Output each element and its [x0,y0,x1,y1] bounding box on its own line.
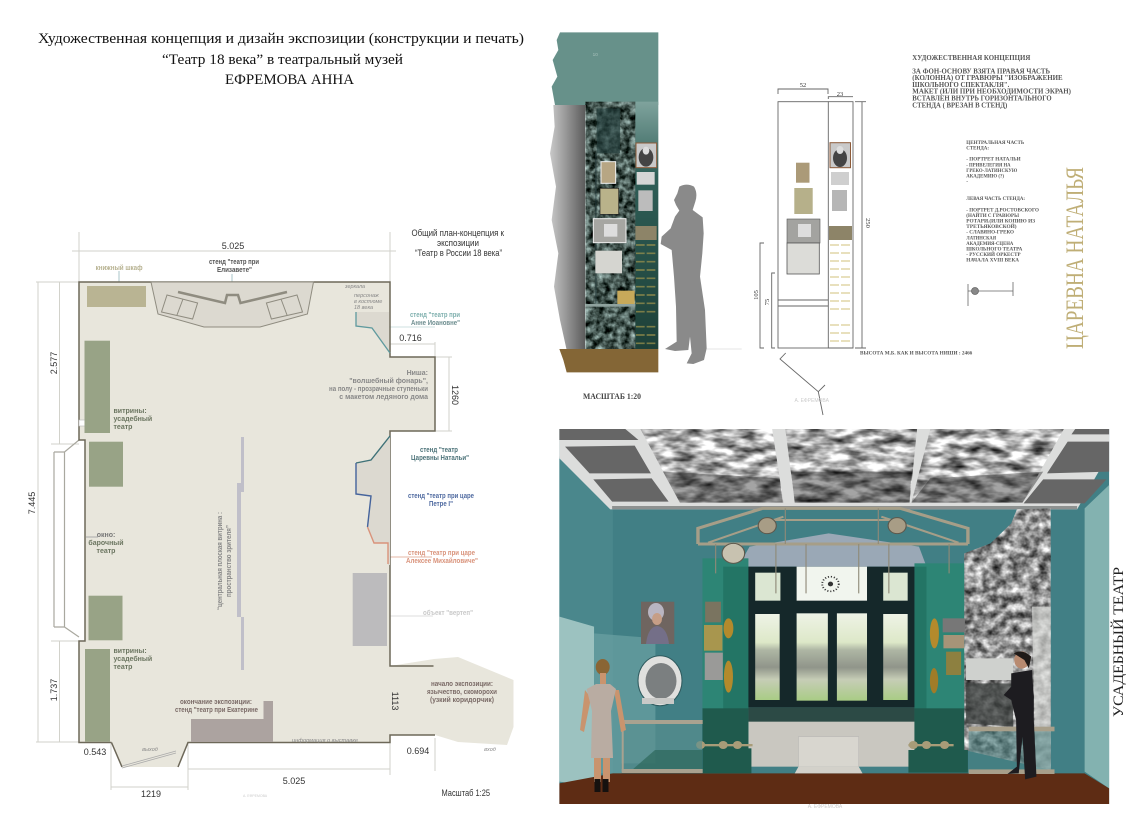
text block: stand parts: ЦЕНТРАЛЬНАЯ ЧАСТЬ [966,140,1025,146]
plan dimensions: 5.025 [222,241,244,251]
title: ЕФРЕМОВА АННА [225,72,354,88]
text block: stand parts: ТРЕТЬЯКОВСКОЙ) [966,222,1017,230]
plan dimensions: 0.543 [84,747,106,757]
plan labels: (узкий коридорчик) [430,696,494,704]
elevation outline [760,89,866,415]
right engraving wall [964,508,1051,770]
Catherine stand [191,701,273,742]
plan italic notes: персонаж [354,293,379,299]
panel: room visualization [559,429,1109,804]
plan labels: окончание экспозиции: [180,699,252,706]
elevation artworks [787,143,852,274]
stage truss [698,508,968,593]
text block: stand parts: ШКОЛЬНОГО ТЕАТРА [966,247,1022,253]
stands on right wall [356,436,390,565]
plan heading: экспозиции [437,238,479,248]
stand: Elizabeth [151,282,314,327]
text block: stand parts: (НАЙТИ С ГРАВЮРЫ [966,211,1020,219]
text block: artistic concept: МАКЕТ (ИЛИ ПРИ НЕОБХОДИМОСТИ ЭКРАН) [912,87,1071,96]
floor [559,349,658,372]
elevation dimensions: 75 [764,299,771,305]
text block: stand parts: ГРЕКО-ЛАТИНСКУЮ [966,168,1017,174]
column [585,102,635,349]
plan heading: “Театр в России 18 века” [415,248,502,258]
plan italic notes: в костюме [354,299,382,305]
plan labels: усадебный [114,415,152,423]
plan dimensions: 5.025 [283,776,305,786]
text block: stand parts [966,140,1040,264]
right side wall [1085,485,1109,788]
text block: stand parts: СТЕНДА: [966,146,989,152]
left vitrine in room [622,720,703,773]
plan labels: Алексее Михайловиче" [406,557,478,565]
text block: stand parts: - ПРИВЕЛЕГИЯ НА [966,162,1011,168]
plan labels: Петре I" [429,501,453,508]
text block: stand parts: - СЛАВЯНО-ГРЕКО [966,230,1015,236]
panel: floor plan [27,228,514,799]
plan labels: Ниша: [407,370,428,377]
right panel script [830,245,852,341]
elevation dimensions: 23 [837,91,843,98]
text block: stand parts: ЛЕВАЯ ЧАСТЬ СТЕНДА: [966,196,1025,202]
text block: artistic concept: СТЕНДА ( ВРЕЗАН В СТЕНД) [912,100,1008,109]
stand artworks [593,143,657,304]
dark green lower panels [702,708,968,773]
plan italic notes: 18 века [354,305,373,311]
vitrines [84,341,123,742]
title [38,31,524,88]
right panel [633,102,658,349]
portrait painting [641,602,674,644]
left side wall [559,457,613,783]
plan labels: театр [114,664,132,671]
stand: Anna Ioannovna [356,312,390,353]
plan floor area [79,282,514,767]
plan labels: стенд "театр при царе [408,550,475,557]
elevation dimensions: 52 [800,82,806,89]
plan italic notes: выход [142,747,158,753]
plan dimensions: 1.737 [49,679,59,701]
text block: artistic concept: ХУДОЖЕСТВЕННАЯ КОНЦЕПЦИЯ [912,53,1031,62]
plan dimensions: 0.716 [399,333,422,343]
plan labels: окно: [97,532,115,539]
right vitrine [969,727,1055,774]
plan labels [88,259,497,714]
elevation dimensions [753,82,871,305]
plan italic notes [142,284,496,798]
plan labels: Анне Иоановне" [411,320,460,327]
plan labels: "волшебный фонарь", [349,377,428,385]
plan dimensions: 1219 [141,789,161,799]
plan italic notes: А. ЕФРЕМОВА [243,794,268,798]
doorway shadow [550,105,585,350]
plan labels: театр [114,424,132,431]
elevation dimensions: 105 [753,290,760,300]
gold script on stand [636,245,657,343]
plan dimensions: 7.445 [27,492,37,514]
plan dimensions [27,241,490,799]
elevation dimensions: 250 [864,218,871,228]
left light panel [559,617,594,787]
man figure [1004,651,1036,779]
plan labels: театр [97,548,115,555]
plan dimensions: 2.577 [49,352,59,374]
central flat vitrine [237,437,244,670]
plan labels: на полу - прозрачные ступеньки [329,386,428,393]
title: “Театр 18 века” в театральный музей [162,52,403,68]
plan dimensions: 0.694 [407,746,429,756]
plan dimensions: Масштаб 1:25 [442,788,490,798]
panel: stand visualization [550,32,742,372]
plan labels: стенд "театр при царе [408,493,474,500]
icon: small mechanism sketch [968,282,1013,306]
green niche panels [702,558,748,710]
plan labels: с макетом ледяного дома [339,394,428,401]
plan labels: усадебный [114,655,152,663]
truss wheels [722,518,906,563]
plan heading: Общий план-концепция к [412,228,504,238]
plan labels: язычество, скоморохи [427,689,497,696]
text block: stand parts: - ПОРТРЕТ Д.РОСТОВСКОГО [966,207,1040,213]
text block: artistic concept: ШКОЛЬНОГО СПЕКТАКЛЯ". [912,80,1009,89]
title: Художественная концепция и дизайн экспозиции (конструкции и печать) [38,31,524,47]
dimension lines [36,232,452,790]
text block: stand parts: АКАДЕМИЯ-СЦЕНА [966,241,1013,247]
ceiling [559,429,1109,509]
woman figure [580,659,626,792]
vertep object [353,573,387,646]
plan labels: стенд "театр при [209,259,259,266]
plan labels: начало экспозиции: [431,681,493,688]
height note: ВЫСОТА М.Б. КАК И ВЫСОТА НИШИ : 2466 [860,351,973,357]
plan labels: Елизавете" [217,267,252,274]
plan labels: барочный [88,539,124,547]
plan labels: “центральная плоская витрина : [217,512,224,610]
text block: stand parts: НАЧАЛА XVIII ВЕКА [966,258,1019,264]
text block: artistic concept: (КОЛОННА) ОТ ГРАВЮРЫ "ИЗОБРАЖЕНИЕ [912,73,1063,82]
plan dimensions: 1113 [390,692,400,710]
human silhouette [661,185,707,364]
text block: stand parts: АКАДЕМИЮ (?) [966,173,1004,180]
exit door [122,751,176,768]
plan labels: стенд "театр [420,447,458,454]
floor [559,773,1109,804]
back wall [559,429,1109,804]
oval mirror frame [638,656,682,706]
text block: stand parts: РОТАРИ.(ИЛИ КОПИЮ ИЗ [966,217,1035,224]
plan walls [79,282,435,767]
pediment [738,533,926,567]
plan labels: объект "вертеп" [423,609,473,617]
plan italic notes: вход [484,747,496,753]
plan labels: витрины: [114,648,147,655]
text block: stand parts: - РУССКИЙ ОРКЕСТР [966,250,1021,258]
teal wall [552,32,658,105]
room author credit: А. ЕФРЕМОВА [808,804,843,810]
text block: stand parts: ЛАТИНСКАЯ [966,235,996,241]
plan dimensions: 1260 [450,385,460,405]
plan labels: пространство зрителя” [226,525,233,597]
vertical heading: Tsarevna Natalia: ЦАРЕВНА НАТАЛЬЯ [1062,167,1089,349]
vertical heading: manor theatre: УСАДЕБНЫЙ ТЕАТР [1110,567,1127,717]
plan labels: витрины: [114,408,147,415]
text block: artistic concept: ВСТАВЛЕН ВНУТРЬ ГОРИЗОНТАЛЬНОГО [912,93,1052,102]
plan labels: Царевны Натальи" [411,455,469,462]
window nook [79,420,85,426]
plan labels: книжный шкаф [96,264,143,272]
wall number: 10 [593,52,598,57]
floor line [707,348,742,350]
text block: stand parts: - ПОРТРЕТ НАТАЛЬИ [966,157,1021,163]
text block: artistic concept: ЗА ФОН-ОСНОВУ ВЗЯТА ПРАВАЯ ЧАСТЬ [912,66,1050,75]
wall pictures in niche [704,602,965,693]
scale label: МАСШТАБ 1:20 [583,392,641,401]
bookcase [87,286,146,307]
window [748,567,914,707]
ornament belts [696,741,954,749]
plan labels: стенд "театр при [410,312,460,319]
text block: stand parts: - [966,179,968,185]
text block: artistic concept [912,53,1071,109]
panel: stand elevation drawing [753,82,871,415]
sill and marble base [748,707,914,773]
plan italic notes: зеркала [344,284,365,290]
author: А. ЕФРЕМОВА [794,398,830,404]
plan italic notes: информация о выставке [292,738,358,744]
plan heading [412,228,504,258]
plan labels: стенд "театр при Екатерине [175,707,258,714]
